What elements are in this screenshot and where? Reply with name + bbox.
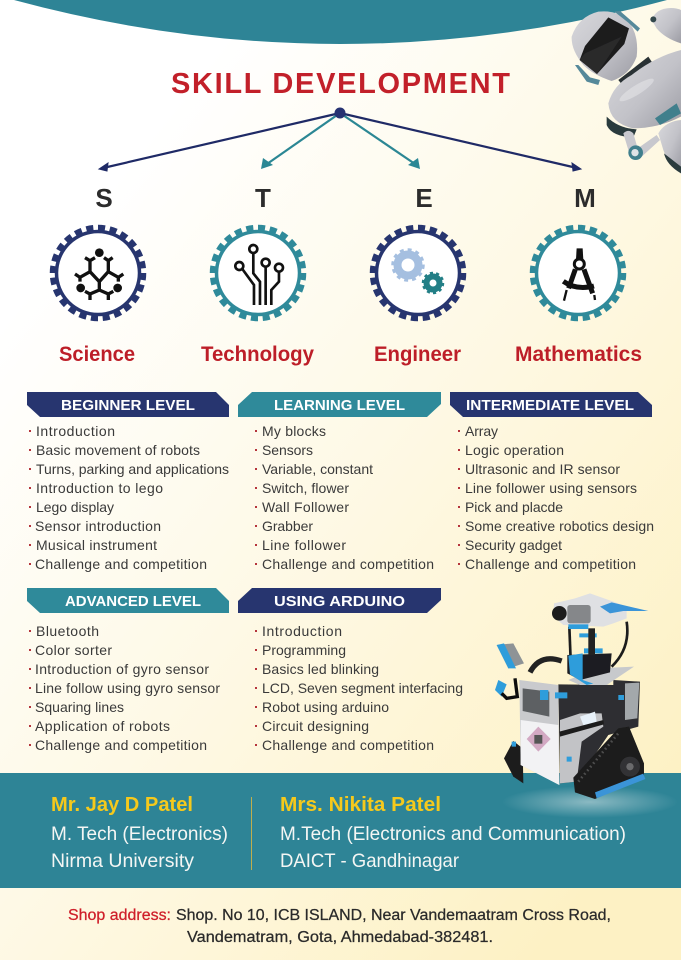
- panel: using arduino: [238, 588, 463, 753]
- panel: advanced level: Color sorter: [35, 642, 112, 658]
- panel: advanced level: Bluetooth: [36, 623, 99, 639]
- panel: using arduino: Introduction: [262, 623, 342, 639]
- STEM letters: E: [415, 183, 433, 213]
- panel: beginner level: Lego display: [36, 499, 114, 515]
- panel: learning level: Sensors: [262, 442, 313, 458]
- instructor: Nikita Patel: Mrs. Nikita Patel: [280, 794, 441, 816]
- panel: beginner level: Basic movement of robots: [36, 442, 200, 458]
- category labels: Mathematics: [515, 343, 642, 366]
- STEM letters: M: [574, 183, 596, 213]
- panel: beginner level: Challenge and competition: [35, 556, 207, 572]
- icon: technology gear: [213, 228, 303, 318]
- panel: intermediate level: INTERMEDIATE LEVEL: [466, 397, 634, 414]
- panel: using arduino: USING ARDUINO: [274, 593, 405, 610]
- panel: advanced level: Line follow using gyro sensor: [35, 680, 220, 696]
- instructor: Jay D Patel: [51, 794, 228, 872]
- panel: intermediate level: Array: [465, 423, 498, 439]
- STEM letters: T: [255, 183, 271, 213]
- panel: learning level: Switch, flower: [262, 480, 349, 496]
- panel: learning level: LEARNING LEVEL: [274, 397, 405, 414]
- panel: intermediate level: Pick and placde: [465, 499, 563, 515]
- icon: science gear: [53, 228, 143, 318]
- panel: intermediate level: Challenge and competition: [465, 556, 636, 572]
- panel: using arduino: Programming: [262, 642, 346, 658]
- panel: using arduino: Basics led blinking: [262, 661, 379, 677]
- panel: learning level: Challenge and competition: [262, 556, 434, 572]
- instructor: Jay D Patel: Mr. Jay D Patel: [51, 794, 193, 816]
- panel: advanced level: ADVANCED LEVEL: [65, 593, 201, 610]
- panel: using arduino: Robot using arduino: [262, 699, 389, 715]
- panel: intermediate level: [450, 392, 654, 572]
- panel: using arduino: LCD, Seven segment interfacing: [262, 680, 463, 696]
- panel: advanced level: Challenge and competition: [35, 737, 207, 753]
- shop address: Shop address:: [68, 907, 171, 924]
- category labels: Science: [59, 343, 135, 366]
- lego robot: [495, 593, 648, 799]
- instructor: Nikita Patel: [280, 794, 626, 872]
- panel: intermediate level: Ultrasonic and IR sensor: [465, 461, 620, 477]
- top teal arc: [14, 0, 667, 44]
- footer teal band: [0, 773, 681, 888]
- panel: intermediate level: Line follower using sensors: [465, 480, 637, 496]
- panel: beginner level: Turns, parking and applications: [36, 461, 229, 477]
- panel: beginner level: [27, 392, 229, 572]
- STEM letters: S: [95, 183, 113, 213]
- panel: learning level: Grabber: [262, 518, 313, 534]
- panel: learning level: My blocks: [262, 423, 326, 439]
- panel: beginner level: Sensor introduction: [35, 518, 161, 534]
- shop address: Vandematram, Gota, Ahmedabad-382481.: [187, 929, 493, 946]
- branching arrows: [99, 108, 581, 171]
- icon: mathematics gear: [533, 228, 623, 318]
- STEM letters: [95, 183, 596, 213]
- panel: learning level: [238, 392, 441, 572]
- category labels: Engineer: [374, 343, 461, 366]
- robot illustration top right: [572, 8, 681, 173]
- panel: intermediate level: Some creative robotics design: [465, 518, 654, 534]
- instructor: Nikita Patel: DAICT - Gandhinagar: [280, 850, 459, 872]
- panel: intermediate level: Logic operation: [465, 442, 564, 458]
- panel: using arduino: Challenge and competition: [262, 737, 434, 753]
- icon: engineering gear: [373, 228, 463, 318]
- panel: beginner level: BEGINNER LEVEL: [61, 397, 195, 414]
- instructor: Jay D Patel: Nirma University: [51, 850, 194, 872]
- panel: beginner level: Musical instrument: [36, 537, 157, 553]
- instructor: Nikita Patel: M.Tech (Electronics and Communication): [280, 823, 626, 845]
- panel: beginner level: Introduction: [36, 423, 115, 439]
- panel: advanced level: Squaring lines: [35, 699, 124, 715]
- instructor: Jay D Patel: M. Tech (Electronics): [51, 823, 228, 845]
- shop address: Shop. No 10, ICB ISLAND, Near Vandemaatram Cross Road,: [176, 907, 611, 924]
- panel: intermediate level: Security gadget: [465, 537, 562, 553]
- shop address: [68, 907, 611, 946]
- category labels: [59, 343, 642, 366]
- title: SKILL DEVELOPMENT: [171, 68, 510, 100]
- robot shadow glow: [502, 786, 678, 818]
- panel: advanced level: [27, 588, 229, 753]
- panel: advanced level: Introduction of gyro sensor: [35, 661, 209, 677]
- panel: learning level: Wall Follower: [262, 499, 349, 515]
- panel: learning level: Line follower: [262, 537, 346, 553]
- category labels: Technology: [201, 343, 314, 366]
- panel: learning level: Variable, constant: [262, 461, 373, 477]
- panel: beginner level: Introduction to lego: [36, 480, 163, 496]
- panel: advanced level: Application of robots: [35, 718, 170, 734]
- panel: using arduino: Circuit designing: [262, 718, 369, 734]
